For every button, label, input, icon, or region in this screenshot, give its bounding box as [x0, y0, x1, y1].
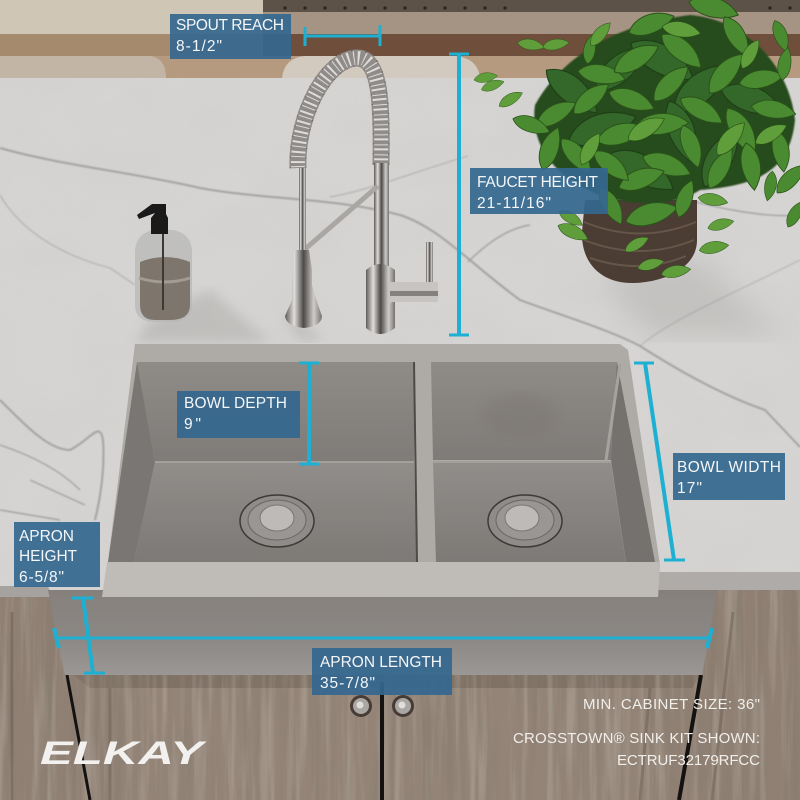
apron lip: [102, 562, 660, 597]
farmhouse sink: [48, 344, 717, 675]
faucet base: [366, 264, 395, 334]
dimension: bowl depth: 9": [184, 416, 201, 433]
dimension: spout reach: [170, 14, 380, 59]
dimension: apron height: 6-5/8": [19, 569, 64, 586]
dimension: apron length: APRON LENGTH: [320, 654, 442, 671]
faucet lever: [388, 242, 438, 305]
dark leaves: [539, 30, 788, 200]
dimension: spout reach: SPOUT REACH: [176, 17, 284, 34]
dimension: spout reach: 8-1/2": [176, 38, 222, 55]
spray tube: [299, 168, 306, 253]
plant foliage mass: [534, 15, 795, 203]
sink apron: [48, 590, 717, 675]
marble countertop: [0, 78, 800, 597]
bright and trailing leaves: [473, 19, 790, 280]
dimension: faucet height: [449, 54, 608, 335]
note: sink kit model: [513, 730, 760, 769]
dimension: apron length: [54, 628, 712, 695]
spray head: [285, 250, 322, 328]
plant pot: [582, 200, 697, 283]
dimension: faucet height: 21-11/16": [477, 195, 551, 212]
dimension: bowl depth: [177, 363, 319, 464]
dimension: faucet height: FAUCET HEIGHT: [477, 174, 599, 191]
mid green leaves: [511, 0, 800, 231]
left bowl: [108, 362, 417, 562]
dimension: apron height: [14, 522, 105, 673]
right drain: [488, 495, 562, 547]
dimension: bowl width: [634, 363, 785, 560]
right bowl: [431, 362, 655, 563]
faucet stem: [374, 163, 389, 268]
cabinet knobs: [350, 695, 414, 717]
left drain: [240, 495, 314, 547]
note: sink kit model: ECTRUF32179RFCC: [617, 752, 760, 769]
logo: Elkay: ELKAY: [40, 735, 207, 771]
dimension: bowl width: 17": [677, 480, 702, 497]
dimension: bowl depth: BOWL DEPTH: [184, 395, 287, 412]
dimension: apron height: HEIGHT: [19, 548, 78, 565]
faucet spring coil: [298, 58, 381, 168]
dimension: apron length: 35-7/8": [320, 675, 375, 692]
sink rim: [103, 344, 660, 597]
dimension: apron height: APRON: [19, 528, 74, 545]
dimension: bowl width: BOWL WIDTH: [677, 459, 781, 476]
note: sink kit model: CROSSTOWN® SINK KIT SHOWN:: [513, 730, 760, 747]
plant: [473, 0, 800, 283]
faucet: [282, 58, 438, 340]
soap dispenser: [135, 204, 192, 322]
background: room behind counter: [0, 0, 800, 80]
faucet arm: [304, 186, 378, 250]
cabinets: [0, 585, 800, 800]
note: minimum cabinet size: MIN. CABINET SIZE: 36": [583, 696, 760, 713]
